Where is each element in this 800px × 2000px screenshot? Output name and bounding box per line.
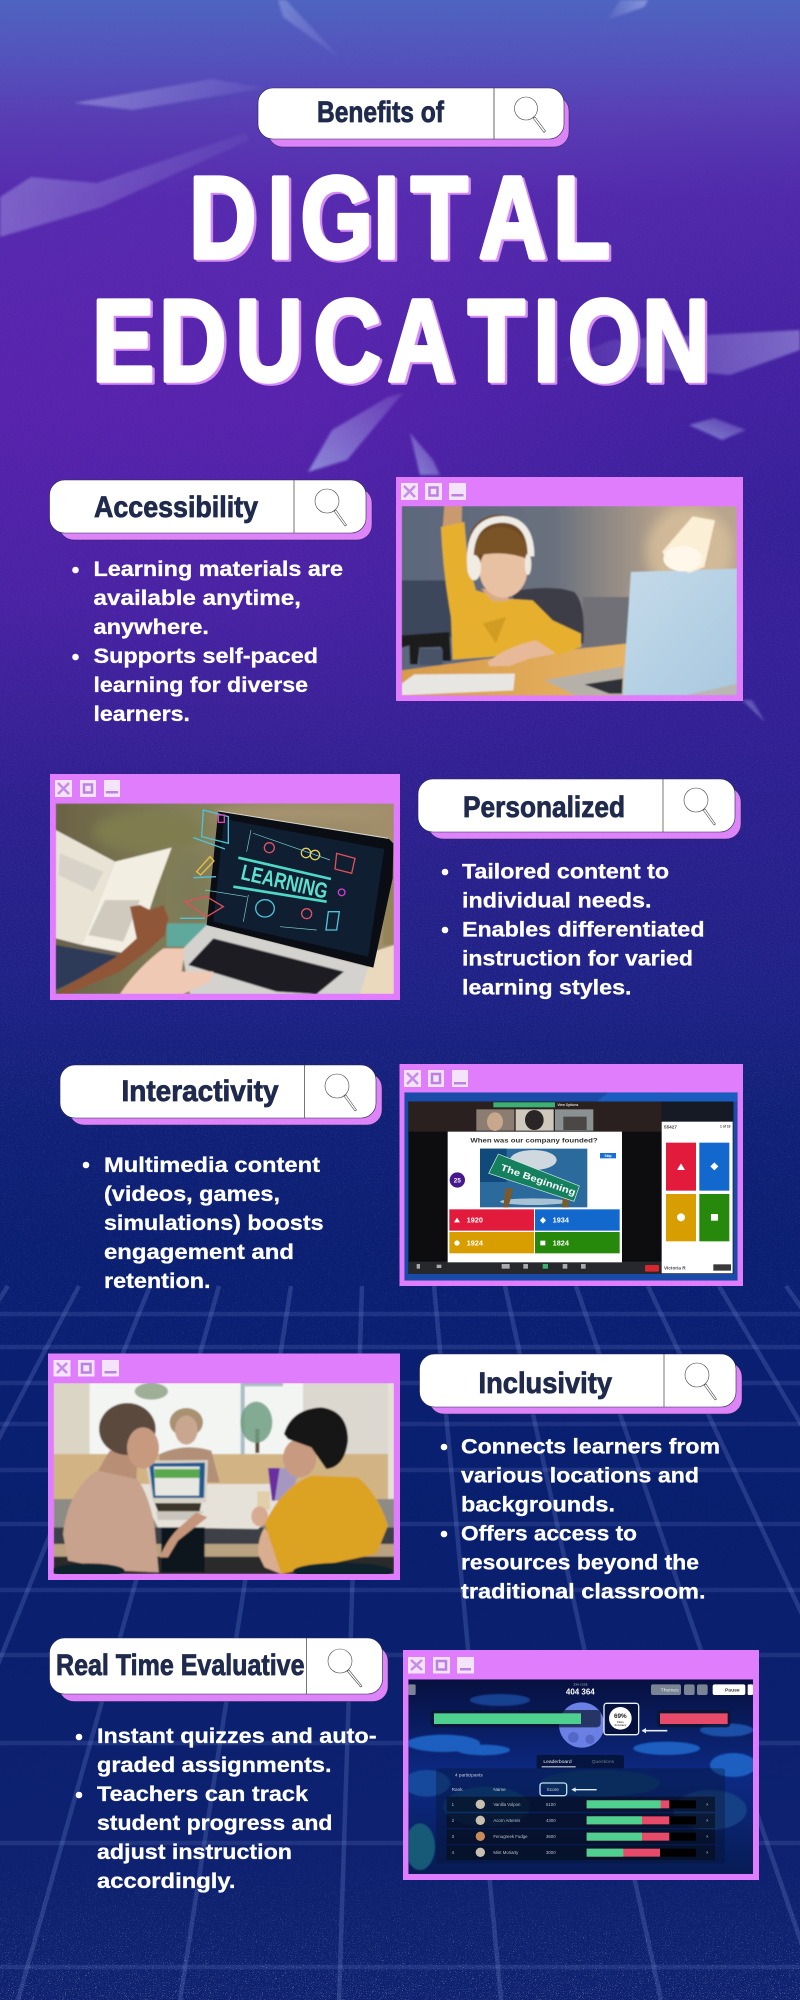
heading: Personalized: Personalized (463, 791, 625, 824)
screenshot: video call quiz: 1 of 10 (720, 1125, 731, 1129)
background perspective grid (0, 1286, 800, 2000)
heading: Accessibility (50, 480, 372, 540)
bullet list: learners. (94, 702, 190, 726)
bullet list: anywhere. (94, 615, 209, 639)
screenshot: live quiz leaderboard: × (706, 1834, 709, 1839)
icon: magnifier (514, 97, 546, 132)
bullet list: (videos, games, (104, 1182, 280, 1206)
screenshot: live quiz leaderboard: Questions (592, 1759, 615, 1765)
search bar: Benefits of (258, 88, 569, 147)
screenshot: live quiz leaderboard: Rank (452, 1787, 463, 1792)
bullet list: student progress and (97, 1811, 332, 1835)
screenshot: live quiz leaderboard: JOIN CODE (573, 1682, 588, 1686)
background light speckle (0, 1050, 800, 2000)
bullet list: Tailored content to (462, 860, 669, 884)
screenshot: live quiz leaderboard (403, 1679, 757, 1874)
panel: Inclusivity (48, 1354, 742, 1604)
bullet list: available anytime, (94, 586, 301, 610)
heading: Inclusivity (420, 1354, 742, 1414)
screenshot: video call quiz: When was our company founded? (470, 1137, 598, 1144)
bullet list (72, 557, 343, 726)
screenshot: video call quiz: View Options (557, 1103, 579, 1107)
window: boy with headphones at laptop (396, 477, 743, 701)
screenshot: live quiz leaderboard: 404 364 (566, 1688, 595, 1697)
heading: Personalized (418, 779, 741, 839)
screenshot: live quiz leaderboard: Class (617, 1720, 624, 1724)
screenshot: video call quiz: 25 (454, 1177, 461, 1184)
bullet list: Teachers can track (97, 1782, 308, 1806)
window: learning laptop (50, 774, 400, 1000)
bullet list: resources beyond the (461, 1550, 699, 1574)
bullet list: retention. (104, 1269, 210, 1293)
background darker glow right (280, 100, 800, 940)
search bar shadow (268, 96, 569, 147)
title line: EDUCATION: EDUCATION (92, 277, 709, 406)
window buttons (401, 483, 466, 500)
bullet list: Instant quizzes and auto- (97, 1724, 376, 1748)
subtitle: Benefits of (317, 96, 445, 129)
screenshot: live quiz leaderboard: 5100 (546, 1802, 556, 1807)
bullet list: instruction for varied (462, 946, 693, 970)
screenshot: live quiz leaderboard: Acorn Artemis (493, 1818, 520, 1823)
screenshot: live quiz leaderboard: Pause (725, 1687, 740, 1693)
background glass shards (0, 0, 800, 722)
window: group of women with laptop (48, 1354, 400, 1580)
screenshot: video call quiz: 1920 (467, 1216, 483, 1225)
screenshot: live quiz leaderboard: 3600 (546, 1834, 556, 1839)
window buttons (54, 1360, 119, 1376)
bullet list: simulations) boosts (104, 1211, 324, 1235)
laptop text: LEARNING (239, 860, 330, 904)
window buttons (55, 780, 120, 797)
photo: women talking at a table (51, 1383, 394, 1580)
bullet list: accordingly. (97, 1869, 236, 1893)
screenshot: live quiz leaderboard: × (706, 1802, 709, 1807)
bullet list: graded assignments. (97, 1753, 332, 1777)
photo: laptop showing LEARNING (56, 803, 394, 994)
bullet list: Offers access to (461, 1522, 637, 1546)
bullet list: various locations and (461, 1464, 699, 1488)
screenshot: live quiz leaderboard: 1 (452, 1802, 455, 1807)
screenshot: live quiz leaderboard: 4 participants (455, 1772, 483, 1777)
heading: Real Time Evaluative: Real Time Evaluative (56, 1649, 304, 1682)
bullet list (441, 1434, 720, 1604)
bullet list: individual needs. (462, 888, 652, 912)
window buttons (408, 1657, 474, 1674)
title (92, 154, 709, 406)
heading: Accessibility: Accessibility (94, 491, 258, 524)
panel: Personalized (50, 774, 741, 1000)
bullet list (83, 1153, 324, 1293)
bullet list: Supports self-paced (94, 644, 318, 668)
panel: Accessibility (50, 477, 743, 726)
heading: Inclusivity: Inclusivity (478, 1367, 612, 1400)
bullet list: Enables differentiated (462, 918, 704, 942)
screenshot: live quiz leaderboard: Themes (661, 1687, 679, 1693)
title line: DIGITAL: DIGITAL (189, 154, 610, 283)
screenshot: live quiz leaderboard: × (706, 1818, 709, 1823)
bullet list: Connects learners from (461, 1434, 720, 1458)
heading: Real Time Evaluative (50, 1638, 388, 1702)
bullet list: learning for diverse (94, 673, 308, 697)
screenshot: video call quiz: The Beginning (499, 1162, 577, 1198)
panel: Real Time Evaluative (50, 1638, 759, 1893)
screenshot: live quiz leaderboard: × (706, 1850, 709, 1855)
panel: Interactivity (60, 1064, 743, 1293)
bullet list: adjust instruction (97, 1840, 292, 1864)
screenshot: live quiz leaderboard: Vanilla Volpon (493, 1802, 521, 1807)
search bar body (258, 88, 564, 139)
screenshot: live quiz leaderboard: 4300 (546, 1818, 556, 1823)
bullet list: traditional classroom. (461, 1580, 706, 1604)
screenshot: video call quiz (404, 1092, 738, 1281)
screenshot: live quiz leaderboard: Score (547, 1787, 559, 1792)
screenshot: live quiz leaderboard: 4 (452, 1850, 455, 1855)
screenshot: video call quiz: 55427 (664, 1125, 677, 1130)
bullet list: Learning materials are (94, 557, 343, 581)
screenshot: video call quiz: 1934 (553, 1216, 570, 1225)
window: leaderboard screenshot (403, 1650, 759, 1880)
photo: child raising hand (402, 506, 737, 697)
background noise texture (0, 186, 800, 1201)
screenshot: live quiz leaderboard: Name (493, 1787, 506, 1792)
screenshot: video call quiz: 1924 (467, 1239, 484, 1248)
bullet list: backgrounds. (461, 1492, 615, 1516)
window: quiz screenshot (400, 1064, 743, 1286)
screenshot: live quiz leaderboard: Fenugreek Fudge (493, 1834, 528, 1839)
screenshot: live quiz leaderboard: 3 (452, 1834, 455, 1839)
bullet list: Multimedia content (104, 1153, 320, 1177)
bullet list (442, 860, 704, 1000)
bullet list: learning styles. (462, 976, 632, 1000)
screenshot: live quiz leaderboard: 2 (452, 1818, 455, 1823)
screenshot: live quiz leaderboard: 69% (614, 1713, 627, 1720)
window buttons (404, 1070, 468, 1087)
screenshot: video call quiz: 1824 (553, 1239, 570, 1248)
screenshot: live quiz leaderboard: Mint Moriarty (493, 1850, 519, 1855)
heading: Interactivity (60, 1065, 382, 1125)
screenshot: live quiz leaderboard: Accuracy (614, 1723, 627, 1727)
bullet list (76, 1724, 376, 1893)
heading: Interactivity: Interactivity (122, 1075, 279, 1108)
screenshot: video call quiz: Skip (604, 1154, 612, 1158)
screenshot: video call quiz: Victoria R (664, 1266, 686, 1271)
bullet list: engagement and (104, 1240, 294, 1264)
screenshot: live quiz leaderboard: Leaderboard (543, 1759, 572, 1765)
screenshot: live quiz leaderboard: 3000 (546, 1850, 556, 1855)
